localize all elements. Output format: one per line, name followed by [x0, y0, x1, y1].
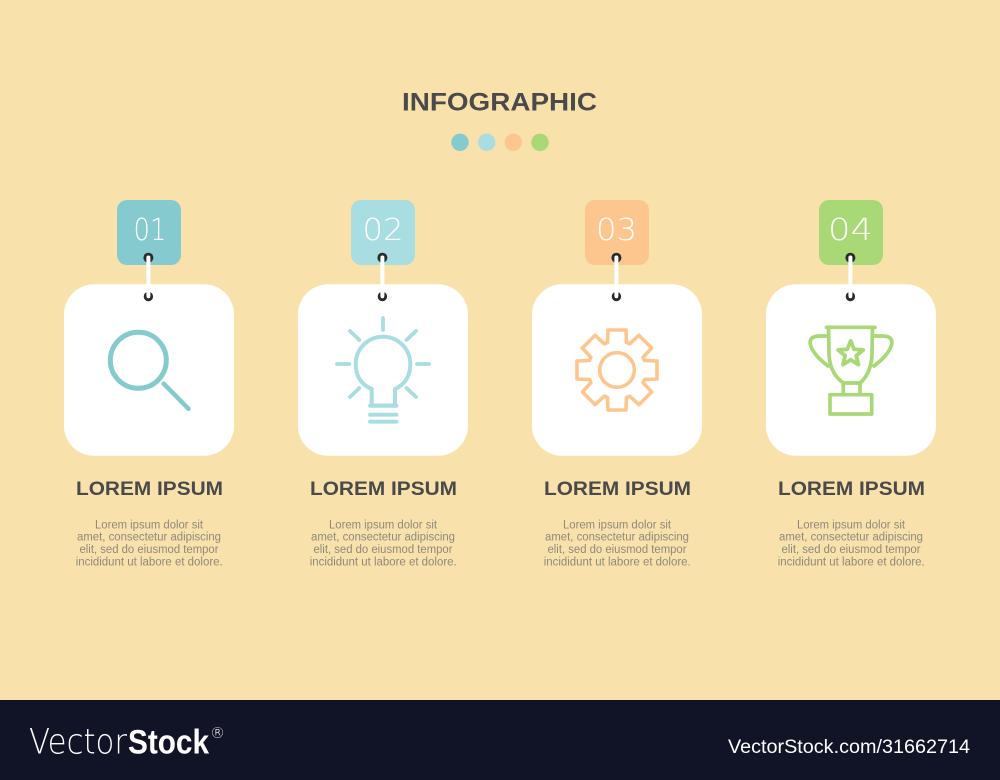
- icon: trophy: [810, 327, 892, 414]
- heading 4: LOREM IPSUM: [778, 479, 925, 500]
- body text 3: incididunt ut labore et dolore.: [544, 556, 691, 568]
- panel: step 3: [532, 200, 702, 568]
- body text 2: Lorem ipsum dolor sit: [329, 520, 438, 532]
- colour dots: [451, 134, 549, 151]
- body text 2: amet, consectetur adipiscing: [311, 532, 455, 544]
- body text 4: [778, 520, 925, 568]
- body text 4: Lorem ipsum dolor sit: [797, 520, 906, 532]
- number tag 04: [819, 200, 883, 265]
- body text 3: amet, consectetur adipiscing: [545, 532, 689, 544]
- body text 2: [310, 520, 457, 568]
- number tag 02: 02: [362, 213, 404, 248]
- body text 3: [544, 520, 691, 568]
- icon: gear: [577, 330, 657, 410]
- number tag 04: 04: [828, 213, 873, 248]
- connector 2: [377, 253, 387, 301]
- footer logo: Stock: [128, 723, 210, 761]
- footer logo: Vector: [29, 722, 128, 762]
- number tag 02: [351, 200, 415, 265]
- body text 4: elit, sed do eiusmod tempor: [782, 544, 921, 556]
- footer image id: VectorStock.com/31662714: [728, 736, 970, 758]
- body text 3: elit, sed do eiusmod tempor: [548, 544, 687, 556]
- body text 4: incididunt ut labore et dolore.: [778, 556, 925, 568]
- card 4: [766, 284, 936, 456]
- footer bar: [0, 700, 1000, 780]
- card 3: [532, 284, 702, 456]
- body text 1: Lorem ipsum dolor sit: [95, 520, 204, 532]
- heading 1: LOREM IPSUM: [76, 479, 223, 500]
- card 1: [64, 284, 234, 456]
- number tag 01: 01: [134, 213, 166, 248]
- panel: step 4: [766, 200, 936, 568]
- title: INFOGRAPHIC: [402, 88, 597, 116]
- icon: light bulb: [337, 318, 429, 422]
- heading 3: LOREM IPSUM: [544, 479, 691, 500]
- connector 1: [143, 253, 153, 301]
- body text 4: amet, consectetur adipiscing: [779, 532, 923, 544]
- panel: step 1: [64, 200, 234, 568]
- connector 3: [611, 253, 621, 301]
- body text 3: Lorem ipsum dolor sit: [563, 520, 672, 532]
- connector 4: [845, 253, 855, 301]
- number tag 03: 03: [596, 213, 637, 248]
- heading 2: LOREM IPSUM: [310, 479, 457, 500]
- footer logo: [29, 722, 225, 762]
- body text 1: incididunt ut labore et dolore.: [76, 556, 223, 568]
- body text 2: incididunt ut labore et dolore.: [310, 556, 457, 568]
- icon: magnifier: [110, 332, 188, 409]
- body text 1: elit, sed do eiusmod tempor: [80, 544, 219, 556]
- panel: step 2: [298, 200, 468, 568]
- body text 2: elit, sed do eiusmod tempor: [314, 544, 453, 556]
- number tag 03: [585, 200, 649, 265]
- card 2: [298, 284, 468, 456]
- number tag 01: [117, 200, 181, 265]
- body text 1: [76, 520, 223, 568]
- footer logo: ®: [210, 724, 225, 742]
- body text 1: amet, consectetur adipiscing: [77, 532, 221, 544]
